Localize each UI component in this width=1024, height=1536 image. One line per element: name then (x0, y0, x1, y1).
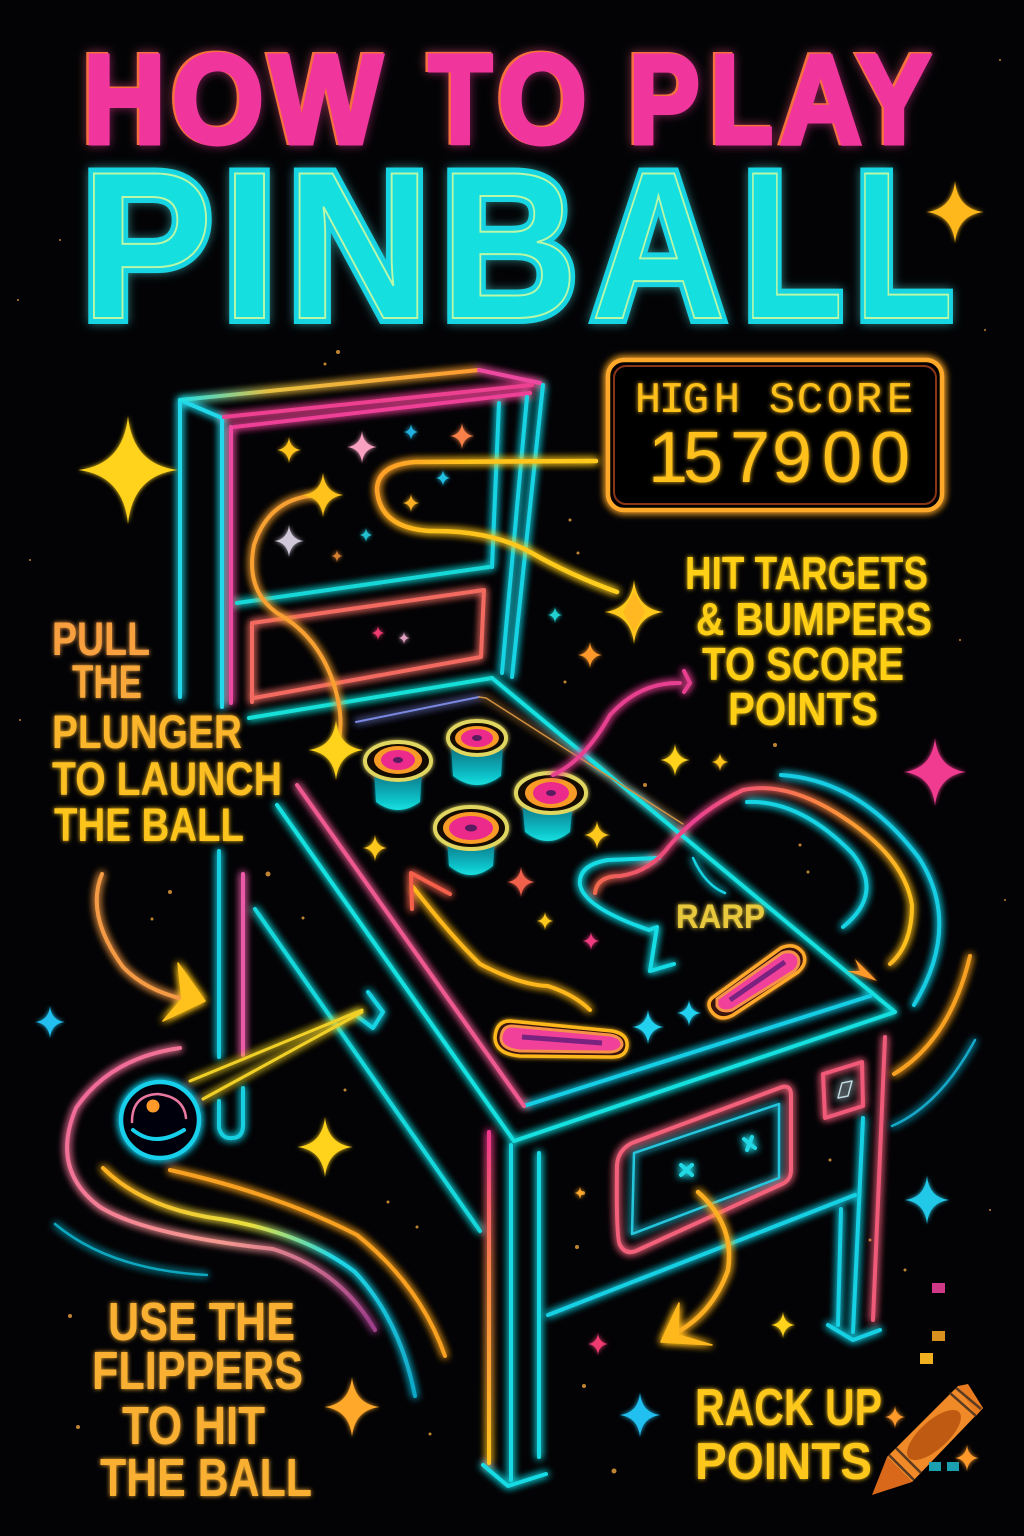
score box (608, 360, 942, 510)
callout: hit targets: POINTS (728, 683, 878, 735)
title: pinball: L (854, 128, 953, 363)
back leg and brace (219, 851, 480, 1231)
star: pink right (904, 738, 966, 806)
bumper 1 (365, 742, 431, 810)
backbox (180, 370, 543, 718)
callout: hit targets (685, 547, 932, 735)
plunger rod (190, 1010, 362, 1099)
high score label: HIGH SCORE (635, 376, 913, 426)
decorative pixel squares (920, 1283, 959, 1471)
title: how to play: A (778, 28, 860, 169)
right leg and lower brace (548, 1037, 885, 1340)
arrow: playfield flipper shot (411, 873, 590, 1010)
arrow: high score to star (377, 461, 617, 592)
callout: pull the plunger: THE (72, 655, 142, 708)
title: how to play: P (629, 29, 700, 170)
title: how to play: H (83, 29, 166, 170)
swoosh: yellow to cyan (103, 1168, 415, 1396)
star: large yellow left (78, 416, 178, 524)
arrows and swooshes (55, 461, 975, 1396)
title: pinball: B (440, 128, 578, 363)
bumper 3 (516, 773, 586, 841)
pop bumpers (365, 721, 586, 875)
bumper 2 (448, 721, 506, 785)
star: title right (926, 181, 984, 243)
title: how to play: O (170, 28, 262, 169)
star: landing (308, 720, 364, 780)
title: pinball: P (81, 128, 213, 363)
title: how to play: W (270, 29, 382, 170)
callout: hit targets: & BUMPERS (696, 593, 932, 645)
title: how to play: Y (855, 28, 929, 169)
front coin panel (617, 1087, 791, 1252)
title: how to play: O (172, 29, 264, 170)
ramp label: RARP (676, 898, 765, 936)
callout: pull the plunger: PULL (52, 612, 150, 665)
star: playfield yellow (297, 1117, 353, 1177)
star: orange lower (324, 1377, 380, 1437)
title: pinball: N (286, 128, 431, 363)
sparkle stars (35, 181, 984, 1471)
ball (121, 1082, 199, 1158)
title: how to play: A (780, 29, 862, 170)
title: how to play: W (268, 28, 380, 169)
title: pinball: L (742, 128, 843, 363)
swoosh: orange (170, 1170, 445, 1356)
callout: rack up points (695, 1379, 882, 1491)
callout: use the flippers: FLIPPERS (92, 1341, 303, 1401)
bumper 4 (435, 807, 507, 875)
title: how to play: T (429, 29, 492, 170)
icon: crayon (872, 1384, 983, 1495)
callout: use the flippers: USE THE (108, 1292, 295, 1352)
arrow: rack up points (661, 1192, 729, 1345)
title: how to play (81, 28, 931, 170)
title: how to play: L (710, 29, 773, 170)
score box inner line (614, 366, 936, 504)
title: how to play: H (81, 28, 164, 169)
callout: pull the plunger: PLUNGER (52, 705, 242, 758)
star: target (605, 580, 663, 644)
callout: pull the plunger (52, 612, 282, 851)
title: how to play: L (708, 28, 771, 169)
callout: pull the plunger: TO LAUNCH (52, 752, 282, 805)
swoosh: right cyan (892, 1040, 975, 1126)
title: pinball: B (440, 128, 578, 363)
title: pinball: A (591, 128, 726, 363)
title: how to play: P (627, 28, 698, 169)
arrow: bumper to targets label (553, 671, 690, 775)
callout: hit targets: TO SCORE (702, 638, 904, 690)
ramp arrow tip (847, 959, 877, 981)
left flipper (495, 1021, 627, 1057)
title: pinball: L (854, 128, 953, 363)
title: how to play: T (427, 28, 490, 169)
ramp (580, 775, 939, 1005)
callout: pull the plunger: THE BALL (54, 798, 244, 851)
star: launch apex (303, 473, 343, 517)
title: pinball: I (222, 128, 278, 363)
title: pinball (81, 128, 953, 363)
callout: rack up points: RACK UP (695, 1379, 882, 1437)
score value: 157900 (648, 418, 910, 498)
coin slot (823, 1062, 863, 1118)
title: pinball: A (591, 128, 726, 363)
callout: hit targets: HIT TARGETS (685, 547, 928, 599)
arrow: pull the plunger (97, 874, 205, 1021)
arrow: launch path (252, 495, 341, 747)
callout: use the flippers: TO HIT (122, 1396, 265, 1456)
swoosh: faint cyan (55, 1224, 207, 1275)
high score display (608, 360, 942, 510)
title: pinball: L (742, 128, 843, 363)
title: how to play: O (496, 28, 585, 169)
left front leg (483, 1132, 546, 1486)
right flipper (709, 946, 805, 1018)
title: pinball: P (81, 128, 213, 363)
title: how to play: O (498, 29, 587, 170)
callout: use the flippers (92, 1292, 312, 1508)
swoosh: pink (67, 1048, 375, 1330)
callout: rack up points: POINTS (695, 1433, 872, 1491)
title: pinball: N (286, 128, 431, 363)
title: pinball: I (222, 128, 278, 363)
pinball machine (180, 370, 939, 1486)
swoosh: right orange (894, 956, 970, 1074)
playfield (277, 678, 895, 1141)
callout: use the flippers: THE BALL (100, 1448, 312, 1508)
title: how to play: Y (857, 29, 931, 170)
small stars (35, 423, 979, 1471)
